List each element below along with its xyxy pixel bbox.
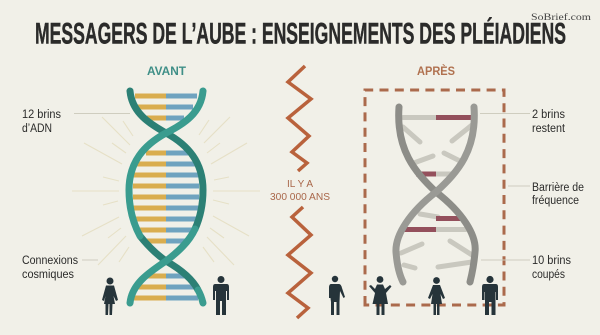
icon: man right xyxy=(482,276,498,315)
label: 10 brins xyxy=(481,255,571,281)
label: 2 brins: restent xyxy=(532,123,566,135)
label: 2 brins xyxy=(480,109,566,135)
label: 12 brins xyxy=(22,109,130,135)
icon: woman arms out xyxy=(369,276,392,315)
label: connexions cosmiques xyxy=(22,255,98,281)
label: connexions cosmiques: Connexions xyxy=(22,255,78,267)
panel: après DNA helix xyxy=(396,107,475,282)
label: connexions cosmiques: cosmiques xyxy=(22,269,74,281)
label: 12 brins: d’ADN xyxy=(22,123,52,135)
red rungs xyxy=(403,118,472,230)
label: 10 brins: 10 brins xyxy=(532,255,571,267)
strand dark lower right xyxy=(140,236,198,290)
grey strands xyxy=(399,107,475,282)
gold rungs xyxy=(133,96,166,298)
label: barrière: Barrière de xyxy=(532,182,584,194)
center text xyxy=(270,178,330,203)
heading: après: APRÈS xyxy=(417,63,455,78)
panel: avant DNA helix xyxy=(129,91,203,303)
watermark: SoBrief.com xyxy=(531,12,592,23)
icon: man centre xyxy=(329,276,345,315)
center text: IL Y A xyxy=(287,178,313,190)
broken light rungs xyxy=(401,118,472,268)
arrow: upper zigzag xyxy=(288,66,311,171)
label: 12 brins: 12 brins xyxy=(22,109,61,121)
strand light upper xyxy=(129,91,203,236)
blue rungs xyxy=(166,96,199,298)
label: barrière: fréquence xyxy=(532,195,579,207)
heading: avant: AVANT xyxy=(147,64,187,78)
strand dark upper xyxy=(130,91,203,229)
icon: man left xyxy=(213,276,229,315)
arrow: lower zigzag xyxy=(288,207,311,318)
icon: woman left xyxy=(102,278,118,315)
panel: avant rays xyxy=(72,117,260,265)
strand light tail xyxy=(198,290,203,303)
barrier frame xyxy=(365,90,504,305)
icon: woman right xyxy=(428,277,445,315)
center text: 300 000 ANS xyxy=(270,191,330,203)
label: barrière xyxy=(508,182,584,207)
label: 2 brins: 2 brins xyxy=(532,109,565,121)
label: 10 brins: coupés xyxy=(532,269,565,281)
strand light lower left xyxy=(130,229,195,303)
